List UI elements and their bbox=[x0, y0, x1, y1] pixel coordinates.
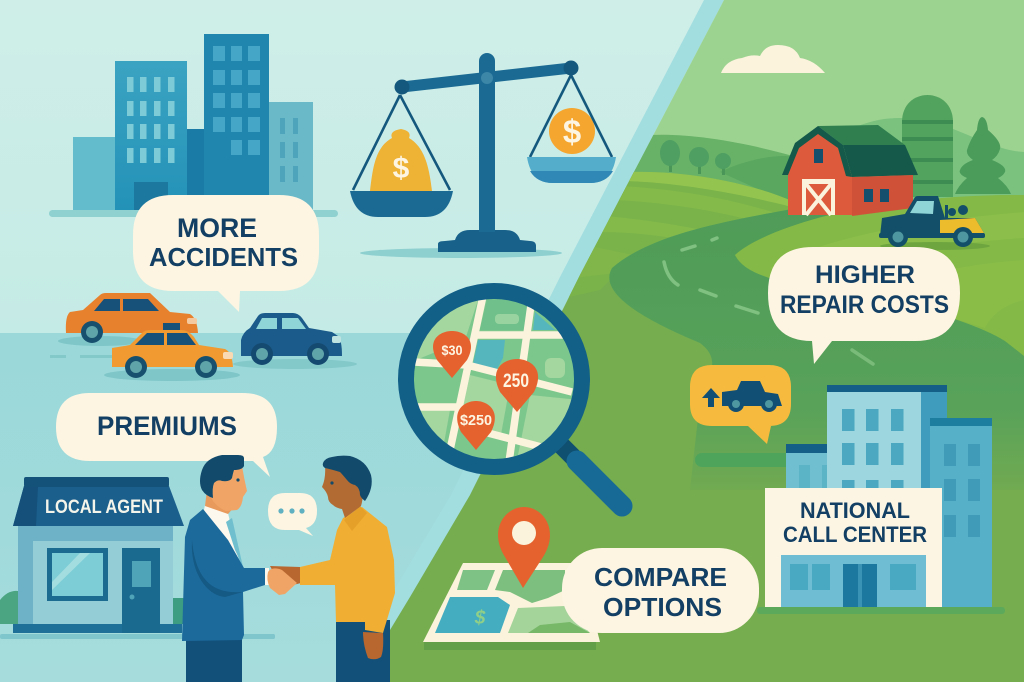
orange car front bbox=[112, 330, 233, 378]
man in suit bbox=[182, 455, 275, 682]
local agent office: LOCAL AGENT bbox=[45, 497, 163, 518]
cloud bbox=[721, 45, 825, 73]
bubble: more accidents bbox=[133, 195, 319, 312]
pine tree bbox=[955, 117, 1011, 194]
pin 250: 250 bbox=[503, 371, 529, 392]
local agent office bbox=[0, 477, 275, 639]
bubble: higher repair costs: HIGHER bbox=[815, 261, 915, 289]
distant trees bbox=[660, 140, 731, 175]
red barn bbox=[782, 125, 918, 216]
small yellow bubble with truck icon bbox=[690, 365, 791, 444]
scale right pan with coin bbox=[527, 75, 616, 183]
silo bbox=[902, 95, 953, 197]
pickup truck bbox=[879, 196, 990, 250]
paper map with location pin bbox=[423, 507, 600, 650]
pin $250: $250 bbox=[460, 412, 492, 429]
pin 250 bbox=[496, 359, 538, 412]
bubble: more accidents: ACCIDENTS bbox=[149, 242, 298, 272]
pin $250 bbox=[457, 401, 495, 450]
handshake bbox=[267, 566, 301, 595]
man in yellow shirt bbox=[300, 456, 395, 682]
lens map bbox=[414, 299, 574, 459]
bubble: premiums bbox=[56, 393, 277, 477]
national call center: CALL CENTER bbox=[783, 522, 927, 547]
location pin bbox=[498, 507, 550, 588]
bubble: higher repair costs bbox=[768, 247, 960, 364]
balance scale bbox=[350, 53, 616, 258]
magnifier handle bbox=[556, 440, 622, 506]
background: countryside bbox=[340, 0, 1024, 682]
national call center bbox=[757, 385, 1005, 614]
map dollar sign: $ bbox=[474, 608, 486, 629]
scale right pan with coin: $ bbox=[563, 113, 581, 150]
bubble: higher repair costs: REPAIR COSTS bbox=[780, 291, 949, 319]
city skyline bbox=[49, 34, 338, 217]
navy car bbox=[241, 313, 342, 365]
decorative green shadow bbox=[695, 453, 795, 467]
scale left pan with money bag: $ bbox=[393, 152, 410, 185]
pin $30 bbox=[433, 331, 471, 378]
scale left pan with money bag bbox=[350, 95, 453, 217]
magnifying glass with price map bbox=[406, 291, 622, 506]
small ellipsis bubble bbox=[268, 493, 317, 536]
bubble: compare options: COMPARE bbox=[594, 562, 727, 592]
magnifier ring bbox=[406, 291, 582, 467]
pin $30: $30 bbox=[442, 342, 463, 358]
road dashes bbox=[664, 238, 873, 364]
orange car back bbox=[66, 293, 198, 343]
bubble: compare options bbox=[562, 548, 759, 633]
bubble: compare options: OPTIONS bbox=[603, 592, 722, 622]
bubble: premiums: PREMIUMS bbox=[97, 411, 237, 441]
bubble: more accidents: MORE bbox=[177, 213, 257, 243]
traffic cars bbox=[50, 293, 357, 381]
national call center: NATIONAL bbox=[800, 498, 910, 523]
